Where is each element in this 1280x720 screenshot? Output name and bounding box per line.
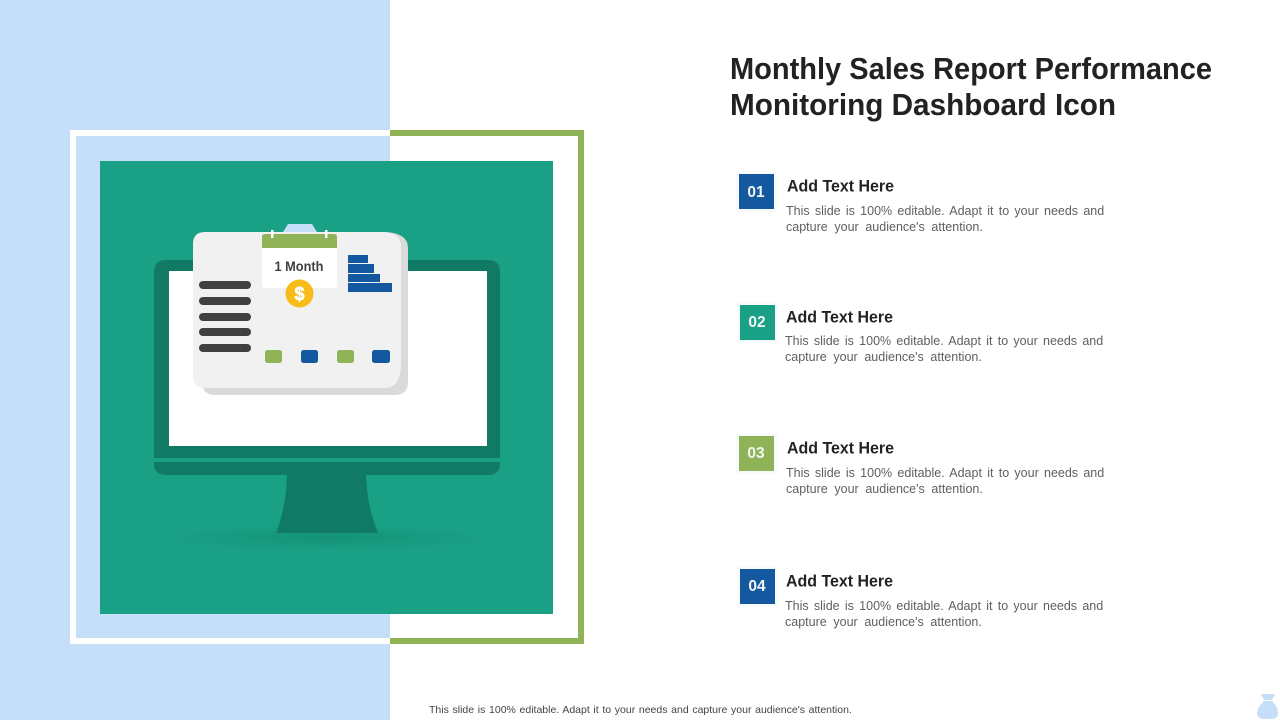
item 01 heading: Add Text Here <box>787 178 894 196</box>
item 03 text: This slide is 100% editable. Adapt it to your needs and <box>786 466 1104 480</box>
icon: dollar coin: $ <box>294 284 305 304</box>
icon: monitor <box>154 260 500 551</box>
item 02 text: This slide is 100% editable. Adapt it to your needs and <box>785 334 1103 348</box>
number badge 02 <box>737 302 778 343</box>
item 02 <box>737 302 1103 364</box>
item 04 text <box>785 599 1103 629</box>
text lines <box>199 281 251 352</box>
item 01 <box>736 171 1104 234</box>
panel: green square <box>100 161 553 614</box>
item 02 text <box>785 334 1103 364</box>
item 04 text: This slide is 100% editable. Adapt it to your needs and <box>785 599 1103 613</box>
number badge 01: 01 <box>747 184 765 201</box>
bar chart <box>348 255 392 292</box>
title: Monthly Sales Report Performance <box>730 51 1212 86</box>
icon: money bag <box>1257 694 1278 719</box>
item 04 <box>737 566 1103 629</box>
item 04 text: capture your audience's attention. <box>785 615 982 629</box>
item 03 <box>736 433 1104 496</box>
frame <box>73 133 581 641</box>
item 03 heading: Add Text Here <box>787 440 894 458</box>
title <box>730 51 1212 122</box>
footer note: This slide is 100% editable. Adapt it to your needs and capture your audience's attention. <box>429 704 852 716</box>
colored squares <box>265 350 390 363</box>
icon: report clipboard <box>193 224 408 395</box>
background panel: light blue <box>0 0 390 720</box>
number badge 02: 02 <box>748 314 766 331</box>
icon: dollar coin <box>286 280 314 308</box>
number badge 03 <box>736 433 777 474</box>
item 01 text <box>786 204 1104 234</box>
calendar card: 1 Month <box>274 259 324 274</box>
number badge 01 <box>736 171 777 212</box>
item 03 text <box>786 466 1104 496</box>
item 01 text: This slide is 100% editable. Adapt it to your needs and <box>786 204 1104 218</box>
number badge 03: 03 <box>747 445 765 462</box>
number badge 04: 04 <box>748 578 766 595</box>
item 04 heading: Add Text Here <box>786 572 893 590</box>
title: Monitoring Dashboard Icon <box>730 87 1116 122</box>
item 02 heading: Add Text Here <box>786 308 893 326</box>
calendar card <box>262 230 337 288</box>
item 03 text: capture your audience's attention. <box>786 482 983 496</box>
item 02 text: capture your audience's attention. <box>785 350 982 364</box>
item 01 text: capture your audience's attention. <box>786 220 983 234</box>
number badge 04 <box>737 566 778 607</box>
